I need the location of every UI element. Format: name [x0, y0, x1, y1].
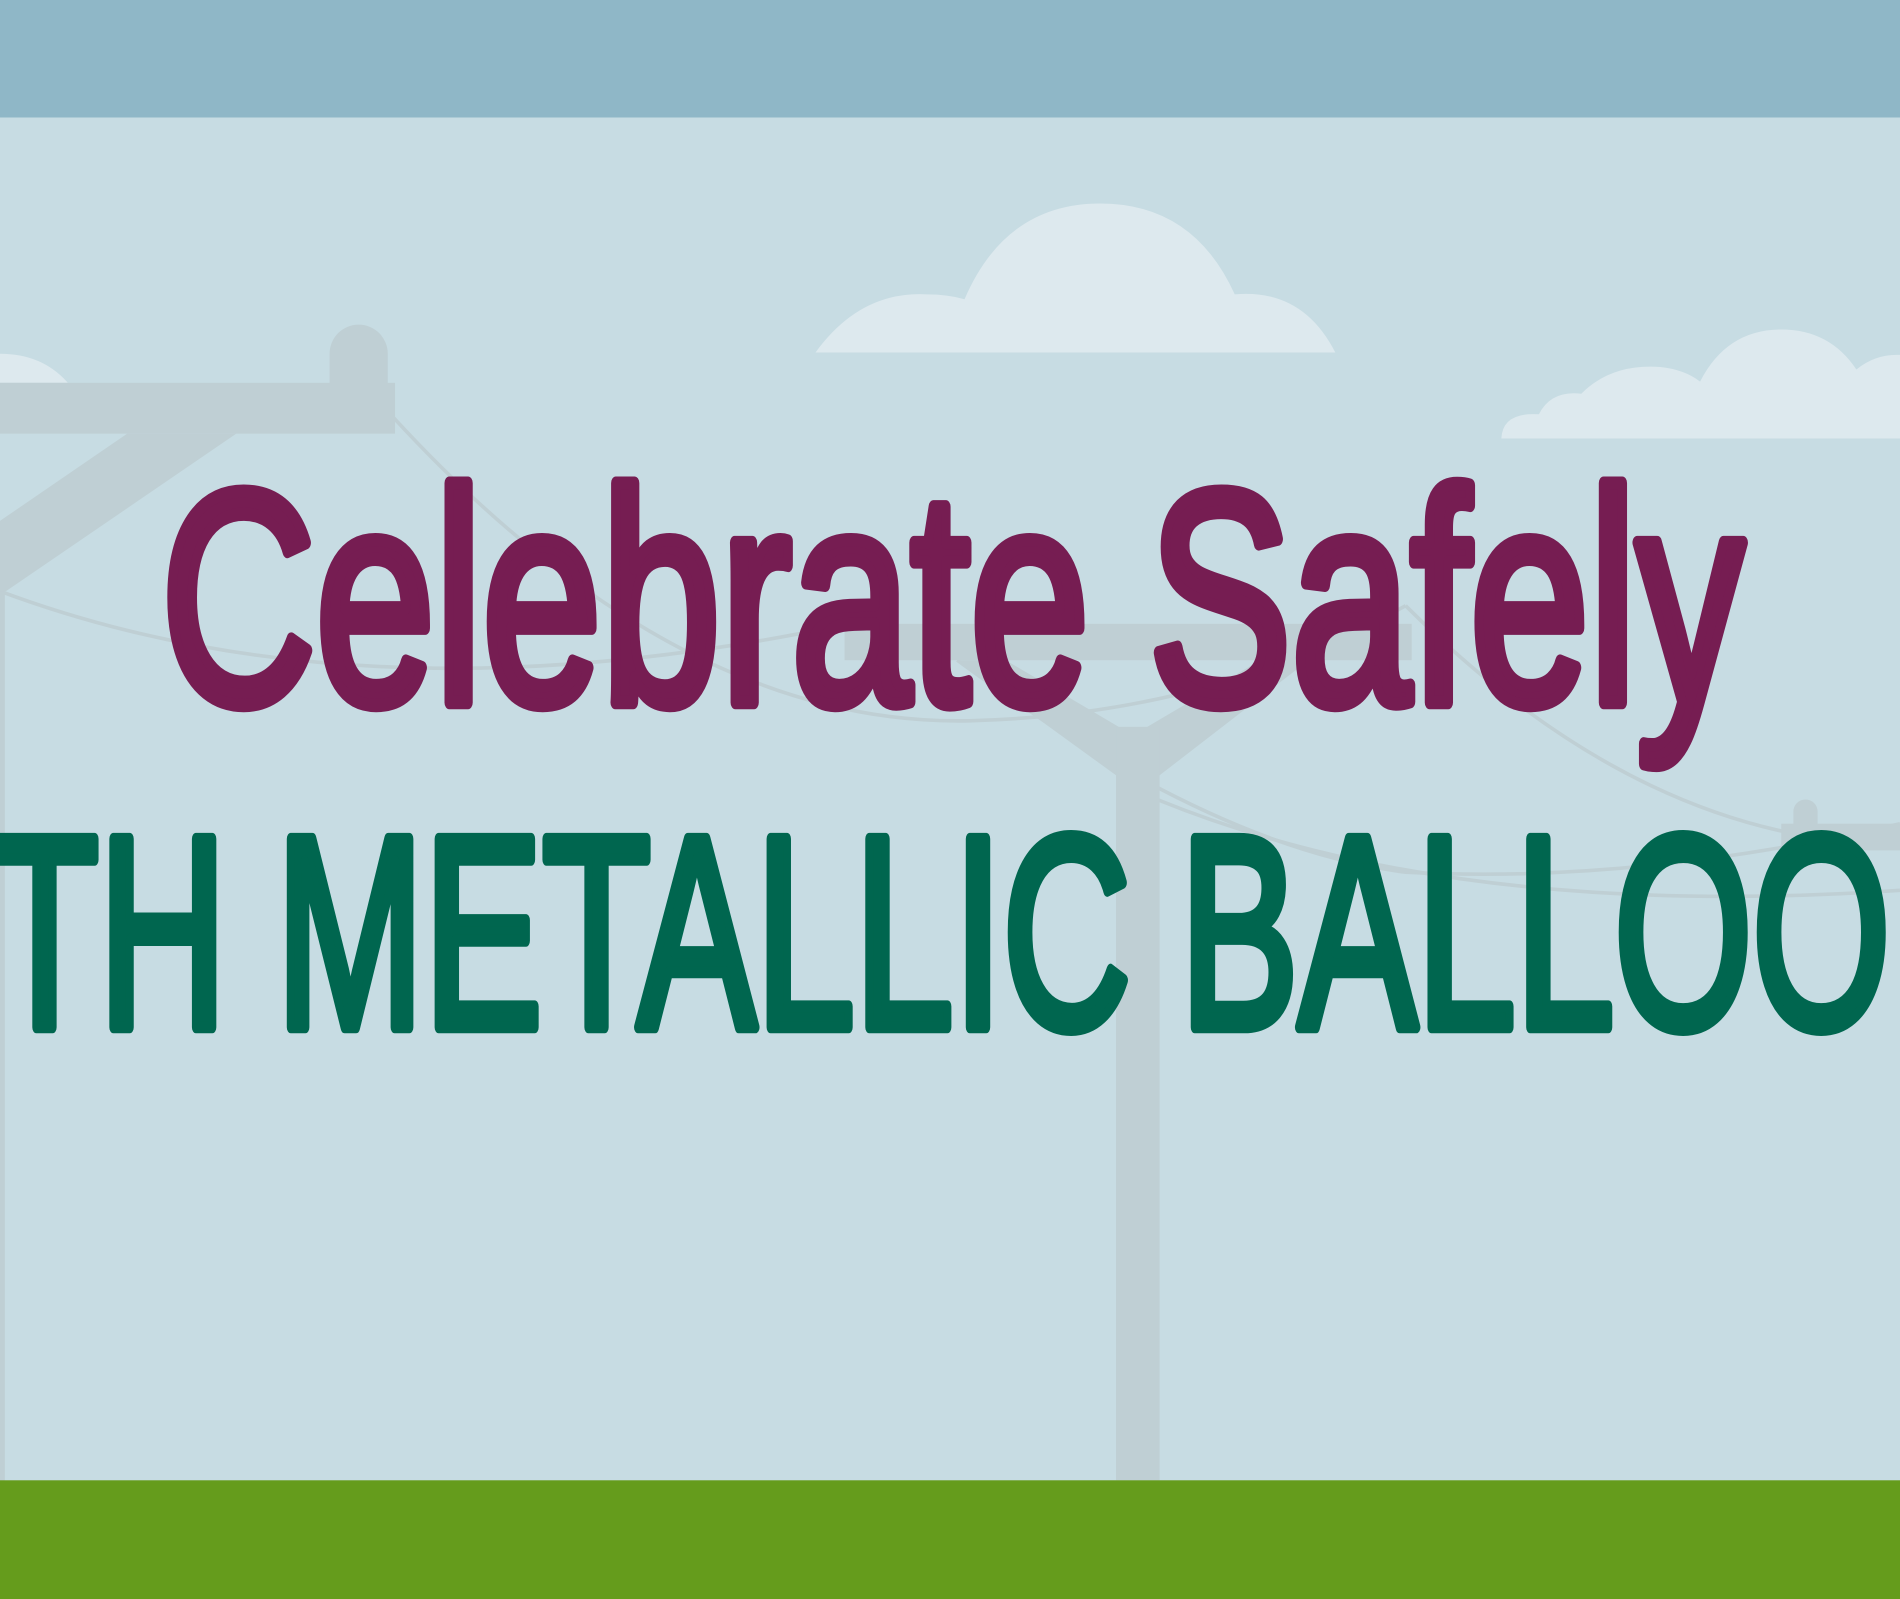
cloud: left: [0, 354, 68, 383]
ground: [0, 1480, 1900, 1599]
utility pole: left: [0, 325, 395, 1481]
cloud: right: [1501, 329, 1900, 439]
top band: [0, 0, 1900, 118]
power lines: [0, 418, 1900, 896]
cloud: center: [815, 204, 1335, 353]
utility pole: center: [845, 624, 1412, 1480]
utility pole: right: [1781, 800, 1900, 850]
